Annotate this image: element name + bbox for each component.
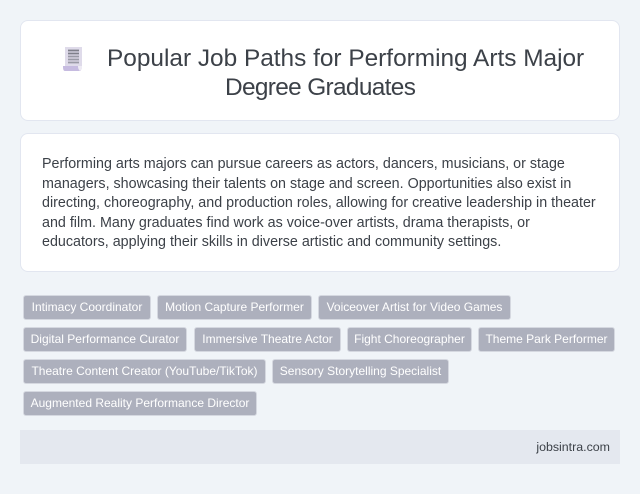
- tag list: [23, 295, 615, 416]
- text block: description: educators, applying their skills in diverse artistic and community settings.: [42, 234, 501, 250]
- panel: title card: [20, 20, 620, 121]
- text block: description: [42, 156, 596, 250]
- text block: description: Performing arts majors can pursue careers as actors, dancers, musicians, or stage: [42, 156, 565, 172]
- icon: scroll: [63, 47, 82, 71]
- tag list: Immersive Theatre Actor: [202, 332, 333, 346]
- tag list: Theatre Content Creator (YouTube/TikTok): [31, 364, 258, 378]
- tag list: Digital Performance Curator: [31, 332, 179, 346]
- heading: [107, 45, 584, 101]
- panel: description: [20, 133, 620, 272]
- text block: description: and film. Many graduates find work as voice-over artists, drama therapists, or: [42, 215, 530, 231]
- tag list: Augmented Reality Performance Director: [31, 396, 249, 410]
- tag list: Theme Park Performer: [485, 332, 608, 346]
- tag list: Voiceover Artist for Video Games: [327, 300, 502, 314]
- footer text: jobsintra.com: [536, 440, 610, 454]
- text block: description: directing, choreography, and production roles, allowing for creative leadership in theater: [42, 195, 596, 211]
- heading: Popular Job Paths for Performing Arts Major: [107, 45, 584, 72]
- tag list: Fight Choreographer: [354, 332, 465, 346]
- tag list: Motion Capture Performer: [165, 300, 304, 314]
- footer bar: [20, 430, 620, 464]
- heading: Degree Graduates: [225, 74, 415, 101]
- tag list: Sensory Storytelling Specialist: [280, 364, 441, 378]
- text block: description: managers, showcasing their talents on stage and screen. Opportunities also exist in: [42, 176, 571, 192]
- tag list: Intimacy Coordinator: [32, 300, 142, 314]
